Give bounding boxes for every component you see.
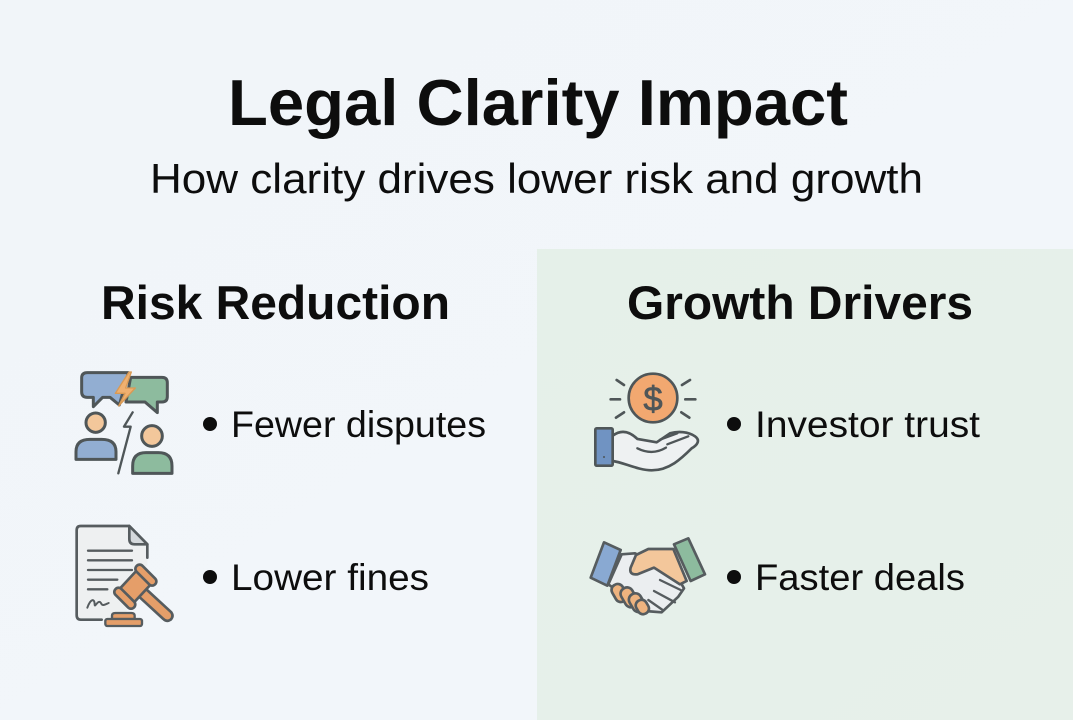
icon: document and gavel bbox=[77, 526, 173, 626]
title: Legal Clarity Impact bbox=[228, 66, 848, 139]
subtitle: How clarity drives lower risk and growth bbox=[150, 155, 923, 202]
icon: handshake bbox=[591, 538, 705, 616]
icon: hand holding dollar coin: $ bbox=[643, 380, 663, 418]
icon: hand holding dollar coin bbox=[595, 374, 698, 470]
heading: growth drivers: Growth Drivers bbox=[627, 276, 973, 329]
panel: growth drivers background bbox=[537, 249, 1073, 720]
heading: risk reduction: Risk Reduction bbox=[101, 276, 450, 329]
list item: faster deals: Faster deals bbox=[755, 557, 965, 598]
list item: investor trust: Investor trust bbox=[755, 404, 981, 445]
list item: fewer disputes: Fewer disputes bbox=[231, 404, 486, 445]
list item: lower fines: Lower fines bbox=[231, 557, 429, 598]
icon: disputing people with speech bubbles bbox=[76, 372, 172, 473]
